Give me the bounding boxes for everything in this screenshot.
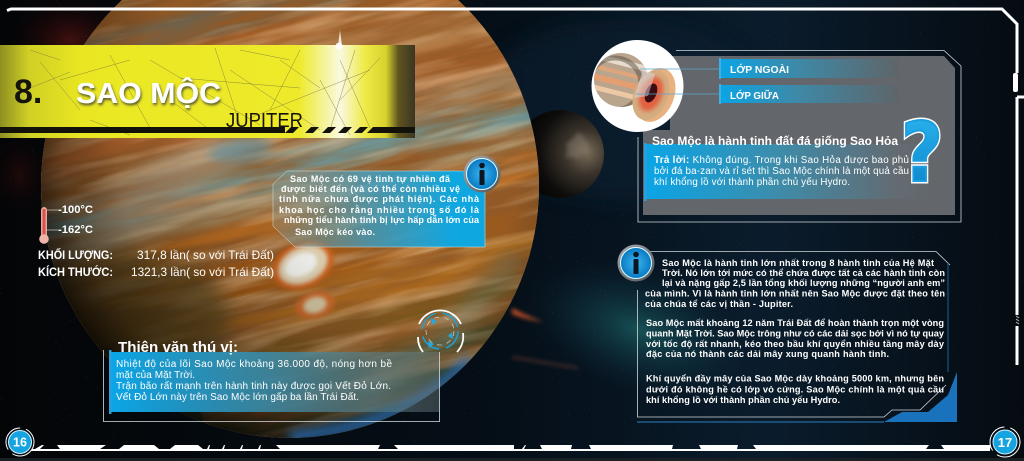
page number 17	[990, 427, 1020, 457]
icon: thermometer	[39, 207, 58, 244]
panel: main description: quanh Mặt Trời. Sao Mộc trông như có các dải sọc bởi vì nó tự quay	[646, 328, 945, 338]
page number 16	[6, 428, 34, 456]
temperature: -162°C	[58, 224, 93, 236]
icon: info	[618, 244, 654, 282]
callout: moons: được biết đến (và có thể còn nhiều vệ	[281, 184, 460, 194]
panel: main description: khí khổng lồ với thành phần chủ yếu Hydro.	[646, 395, 840, 405]
answer box: khí khổng lồ với thành phần chủ yếu Hydro.	[654, 177, 850, 188]
temperature	[39, 204, 93, 244]
panel: main description: với tốc độ rất nhanh, kéo theo bầu khí quyển nhiều tầng mây dày	[646, 339, 945, 349]
page number 17: 17	[998, 435, 1012, 450]
panel: main description: lại và nặng gấp 2,5 lần tổng khối lượng những “người anh em”	[662, 278, 945, 288]
panel: main description: Sao Mộc là hành tinh lớn nhất trong 8 hành tinh của Hệ Mặt	[662, 258, 934, 268]
tag: outer layer	[719, 58, 899, 79]
page number 16: 16	[13, 436, 27, 450]
Jupiter planet	[41, 0, 539, 438]
diagram: Jupiter layers	[587, 40, 719, 132]
panel: main description: Trời. Nó lớn tới mức có thể chứa được tất cả các hành tinh còn	[662, 268, 945, 278]
icon: question mark: ?	[901, 106, 943, 201]
subtitle: Jupiter: JUPITER	[226, 110, 303, 132]
panel: main description	[618, 244, 957, 422]
icon: question mark: ?	[901, 106, 943, 201]
heading: Thiên văn thú vị:	[118, 339, 238, 356]
tag: middle layer	[719, 84, 899, 104]
panel: main description: Sao Mộc mất khoảng 12 năm Trái Đất để hoàn thành trọn một vòng	[646, 318, 944, 328]
chapter number: 8.	[14, 73, 42, 111]
panel: main description: của mình. Vì là hành tinh lớn nhất nên Sao Mộc được đặt theo tên	[645, 288, 945, 298]
stats: mass and size: 317,8 lần( so với Trái Đất)	[137, 248, 274, 262]
icon: info	[464, 156, 500, 192]
small dark planet	[516, 110, 604, 198]
stats: mass and size: KHỐI LƯỢNG:	[38, 247, 113, 262]
panel: main description: dưới đó không hề có lớp vỏ cứng. Sao Mộc chính là một quả cầu	[646, 384, 944, 394]
stats: mass and size: KÍCH THƯỚC:	[38, 264, 113, 279]
tag: outer layer: LỚP NGOÀI	[730, 63, 789, 76]
blue corner	[884, 372, 957, 422]
panel: fun astronomy: Nhiệt độ của lõi Sao Mộc khoảng 36.000 độ, nóng hơn bề	[116, 358, 392, 370]
answer box	[644, 136, 940, 201]
panel: main description: Khí quyển đầy mây của Sao Mộc dày khoảng 5000 km, nhưng bên	[646, 374, 944, 384]
callout: moons: những tiểu hành tinh bị lực hấp dẫn lớn của	[284, 215, 480, 225]
title banner	[0, 30, 415, 138]
answer box: bởi đá ba-zan và rỉ sét thì Sao Mộc chính là một quả cầu	[654, 166, 909, 177]
panel: fun astronomy: Trận bão rất mạnh trên hành tinh này được gọi Vết Đỏ Lớn.	[116, 380, 391, 392]
panel: question	[638, 50, 961, 222]
temperature: -100°C	[58, 204, 93, 216]
tag: middle layer: LỚP GIỮA	[730, 89, 779, 102]
callout: moons: Sao Mộc kéo vào.	[295, 227, 375, 237]
callout: moons: Sao Mộc có 69 vệ tinh tự nhiên đã	[290, 174, 451, 184]
answer box: Trả lời: Không đúng. Trong khi Sao Hỏa được bao phủ	[654, 155, 909, 166]
panel: fun astronomy	[104, 339, 440, 422]
panel: fun astronomy: Vết Đỏ Lớn này trên Sao Mộc lớn gấp ba lần Trái Đất.	[116, 391, 359, 403]
icon: target circle	[418, 310, 463, 352]
callout: moons	[273, 156, 500, 247]
panel: main description: đặc của nó thành các dải mây xung quanh hành tinh.	[646, 349, 889, 359]
answer box: Sao Mộc là hành tinh đất đá giống Sao Hỏa	[652, 136, 899, 148]
stats: mass and size	[38, 247, 274, 279]
stats: mass and size: 1321,3 lần( so với Trái Đất)	[131, 265, 274, 279]
panel: main description: của chúa tể các vị thần - Jupiter.	[645, 299, 793, 309]
title: Sao Mộc: SAO MỘC	[76, 76, 221, 110]
callout: moons: tinh nữa chưa được phát hiện). Các nhà	[279, 194, 480, 204]
callout: moons: khoa học cho rằng nhiều trong số đó là	[279, 204, 480, 215]
panel: fun astronomy: mặt của Mặt Trời.	[116, 369, 195, 381]
